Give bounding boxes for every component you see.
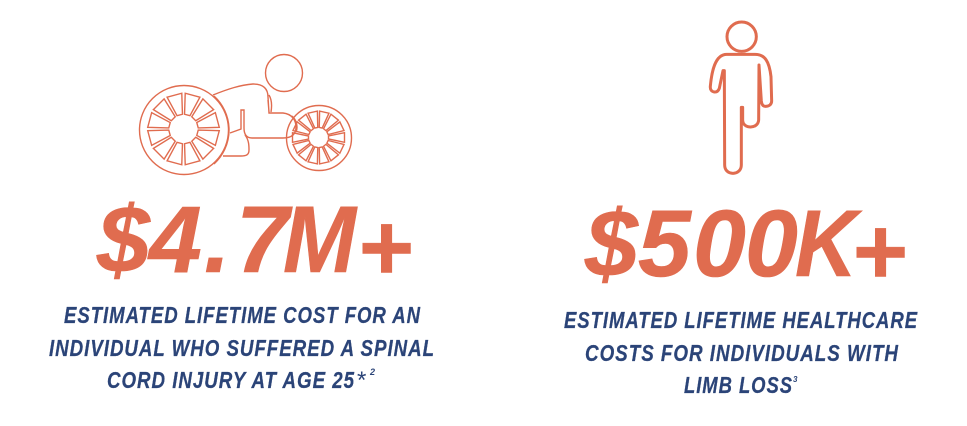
head xyxy=(727,22,756,51)
caption: spinal cord injury: CORD INJURY AT AGE 25 xyxy=(107,367,355,393)
stat: $500K+: $ xyxy=(584,191,639,297)
big wheel xyxy=(140,86,229,174)
caption: spinal cord injury: INDIVIDUAL WHO SUFFERED A SPINAL xyxy=(49,335,435,361)
caption: spinal cord injury xyxy=(49,302,435,394)
stat: $500K+: 0 xyxy=(745,191,798,297)
stat: $4.7M+: 7 xyxy=(236,187,293,293)
caption: limb loss: LIMB LOSS xyxy=(684,372,793,398)
caption: limb loss: 3 xyxy=(793,375,798,384)
body xyxy=(213,84,297,156)
stat: $500K+: 5 xyxy=(638,191,692,297)
caption: spinal cord injury: 2 xyxy=(369,367,376,377)
caption: limb loss xyxy=(564,307,918,398)
stat: $4.7M+: . xyxy=(204,187,230,293)
stat: $4.7M+: 4 xyxy=(147,187,202,293)
stat: $4.7M+ xyxy=(96,187,412,301)
icon: person with limb loss xyxy=(710,22,772,173)
stat: $4.7M+: + xyxy=(357,195,412,301)
body xyxy=(710,54,772,173)
stat: $500K+ xyxy=(584,191,906,305)
stat: $500K+: 0 xyxy=(693,191,746,297)
stat: $500K+: + xyxy=(851,199,906,305)
small wheel xyxy=(286,106,352,170)
icon: wheelchair athlete xyxy=(140,54,352,174)
stat: $4.7M+: $ xyxy=(96,187,151,293)
stat: $4.7M+: M xyxy=(283,187,358,293)
caption: spinal cord injury: ESTIMATED LIFETIME COST FOR AN xyxy=(64,302,421,328)
stat: $500K+: K xyxy=(795,191,863,297)
head xyxy=(266,54,302,92)
caption: limb loss: COSTS FOR INDIVIDUALS WITH xyxy=(585,340,899,366)
caption: spinal cord injury: * xyxy=(356,367,367,394)
